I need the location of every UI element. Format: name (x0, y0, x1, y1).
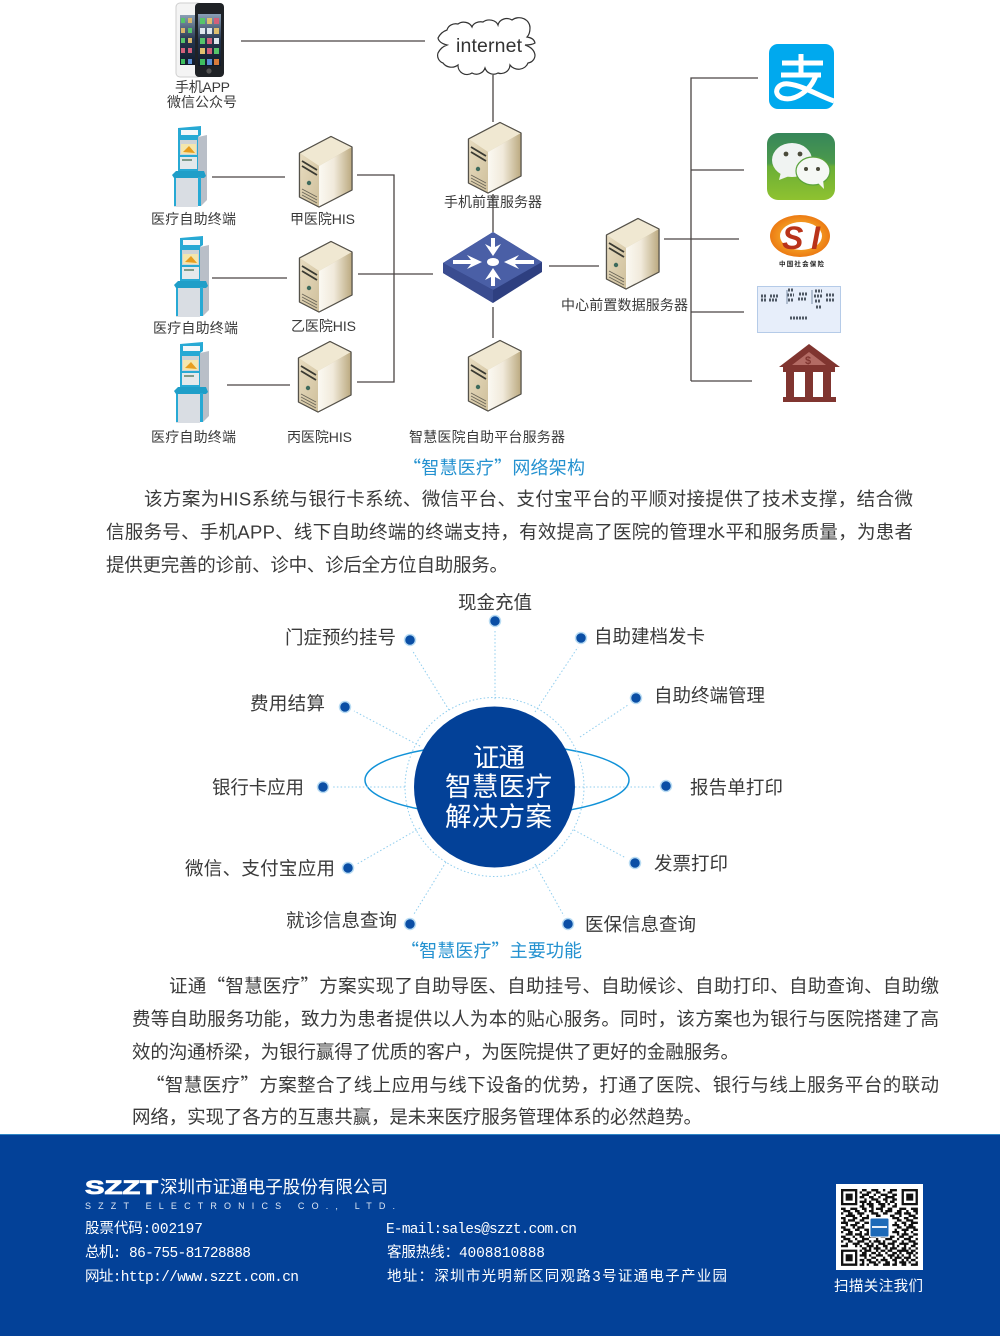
hub circle with title: 智慧医疗 (445, 772, 552, 802)
function labels: 自助终端管理 (654, 685, 765, 706)
function labels: 微信、支付宝应用 (185, 858, 335, 879)
text block: functions description (132, 972, 939, 1128)
icon: social insurance logo (770, 215, 830, 268)
text block: network description: 提供更完善的诊前、诊中、诊后全方位自助服务。 (106, 554, 508, 576)
icon: self-service terminal 1 (172, 126, 207, 207)
icon: self-service terminal 3 (174, 342, 209, 423)
panel: main functions diagram (185, 592, 783, 935)
text block: network description: 该方案为HIS系统与银行卡系统、微信平台、支付宝平台的平顺对接提供了技术支撑，结合微 (144, 488, 913, 510)
function nodes (318, 616, 672, 930)
label: hospital platform server: 智慧医院自助平台服务器 (409, 429, 565, 445)
contact details: 网址:http://www.szzt.com.cn (85, 1268, 299, 1286)
function labels: 门症预约挂号 (285, 627, 396, 648)
label: hospital A: 甲医院HIS (290, 211, 355, 227)
icon: internet cloud (438, 18, 535, 75)
icon: hospital C server (298, 342, 351, 412)
label: phone app: 手机APP (175, 79, 230, 95)
icon: alipay (769, 44, 834, 109)
company logo (85, 1177, 395, 1211)
contact details (85, 1220, 727, 1286)
icon: hospital platform server (468, 340, 521, 411)
hub circle with title: 解决方案 (445, 802, 552, 832)
function labels: 医保信息查询 (585, 914, 696, 935)
icon: self-service terminal 2 (174, 236, 209, 317)
function labels (185, 592, 783, 935)
function labels: 现金充值 (458, 592, 532, 613)
function labels: 银行卡应用 (212, 777, 304, 798)
label: mobile front server: 手机前置服务器 (444, 194, 542, 210)
function labels: 报告单打印 (690, 777, 783, 798)
label: central data server: 中心前置数据服务器 (561, 297, 688, 313)
connector lines (212, 41, 758, 385)
icon: bank: $ (805, 355, 811, 367)
company logo: 深圳市证通电子股份有限公司 (160, 1177, 388, 1197)
dotted connector rays (333, 631, 656, 916)
icon: social insurance logo: SI (782, 220, 821, 256)
orbit ellipse (365, 744, 629, 816)
icon: bank (779, 344, 840, 402)
icon: internet cloud: internet (456, 35, 523, 57)
contact details: 总机: 86-755-81728888 (85, 1244, 251, 1262)
icon: network switch (443, 232, 542, 303)
function labels: 就诊信息查询 (286, 910, 397, 931)
panel: footer (0, 1134, 1000, 1336)
label: terminal 1: 医疗自助终端 (151, 211, 236, 227)
text block: functions description: 费等自助服务功能，致力为患者提供以人为本的贴心服务。同时，该方案也为银行与医院搭建了高 (132, 1008, 939, 1030)
text block: functions description: 效的沟通桥梁，为银行赢得了优质的客户，为医院提供了更好的金融服务。 (132, 1042, 739, 1062)
label: hospital B: 乙医院HIS (291, 318, 356, 334)
label: terminal 3: 医疗自助终端 (151, 429, 236, 445)
panel: network architecture diagram (151, 3, 840, 445)
heading: main functions: “智慧医疗”主要功能 (401, 937, 582, 963)
text block: functions description: 证通“智慧医疗”方案实现了自助导医、自助挂号、自助候诊、自助打印、自助查询、自助缴 (169, 972, 939, 998)
icon: smartphones (176, 3, 224, 77)
label: scan to follow: 扫描关注我们 (834, 1278, 923, 1295)
text block: functions description: 网络，实现了各方的互惠共赢，是未来医疗服务管理体系的必然趋势。 (132, 1106, 702, 1128)
icon: wechat (767, 133, 835, 200)
contact details: E-mail:sales@szzt.com.cn (386, 1222, 577, 1238)
contact details: 客服热线：4008810888 (387, 1244, 545, 1262)
heading: network architecture: “智慧医疗”网络架构 (403, 454, 585, 480)
icon: central data server (606, 218, 659, 289)
icon: social insurance logo: 中国社会保险 (779, 259, 824, 268)
icon: hospital A server (300, 136, 352, 207)
function labels: 自助建档发卡 (594, 626, 705, 647)
contact details: 股票代码:002197 (85, 1220, 203, 1238)
label: hospital C: 丙医院HIS (287, 429, 352, 445)
text block: network description: 信服务号、手机APP、线下自助终端的终端支持，有效提高了医院的管理水平和服务质量，为患者 (106, 522, 913, 542)
function labels: 发票打印 (654, 853, 728, 874)
icon: mobile front server (468, 122, 521, 193)
label: terminal 2: 医疗自助终端 (153, 320, 238, 336)
function labels: 费用结算 (250, 693, 325, 714)
contact details: 地址：深圳市光明新区同观路3号证通电子产业园 (387, 1268, 727, 1286)
icon: payment document (758, 286, 840, 332)
QR code (836, 1184, 923, 1270)
hub circle with title: 证通 (473, 743, 525, 773)
company logo: SZZT ELECTRONICS CO., LTD. (85, 1201, 395, 1211)
text block: functions description: “智慧医疗”方案整合了线上应用与线下设备的优势，打通了医院、银行与线上服务平台的联动 (146, 1072, 939, 1098)
text block: network description (106, 488, 913, 576)
label: wechat account: 微信公众号 (167, 94, 237, 110)
company logo: SZZT (85, 1178, 159, 1199)
hub circle with title (414, 706, 575, 868)
icon: hospital B server (300, 242, 352, 312)
